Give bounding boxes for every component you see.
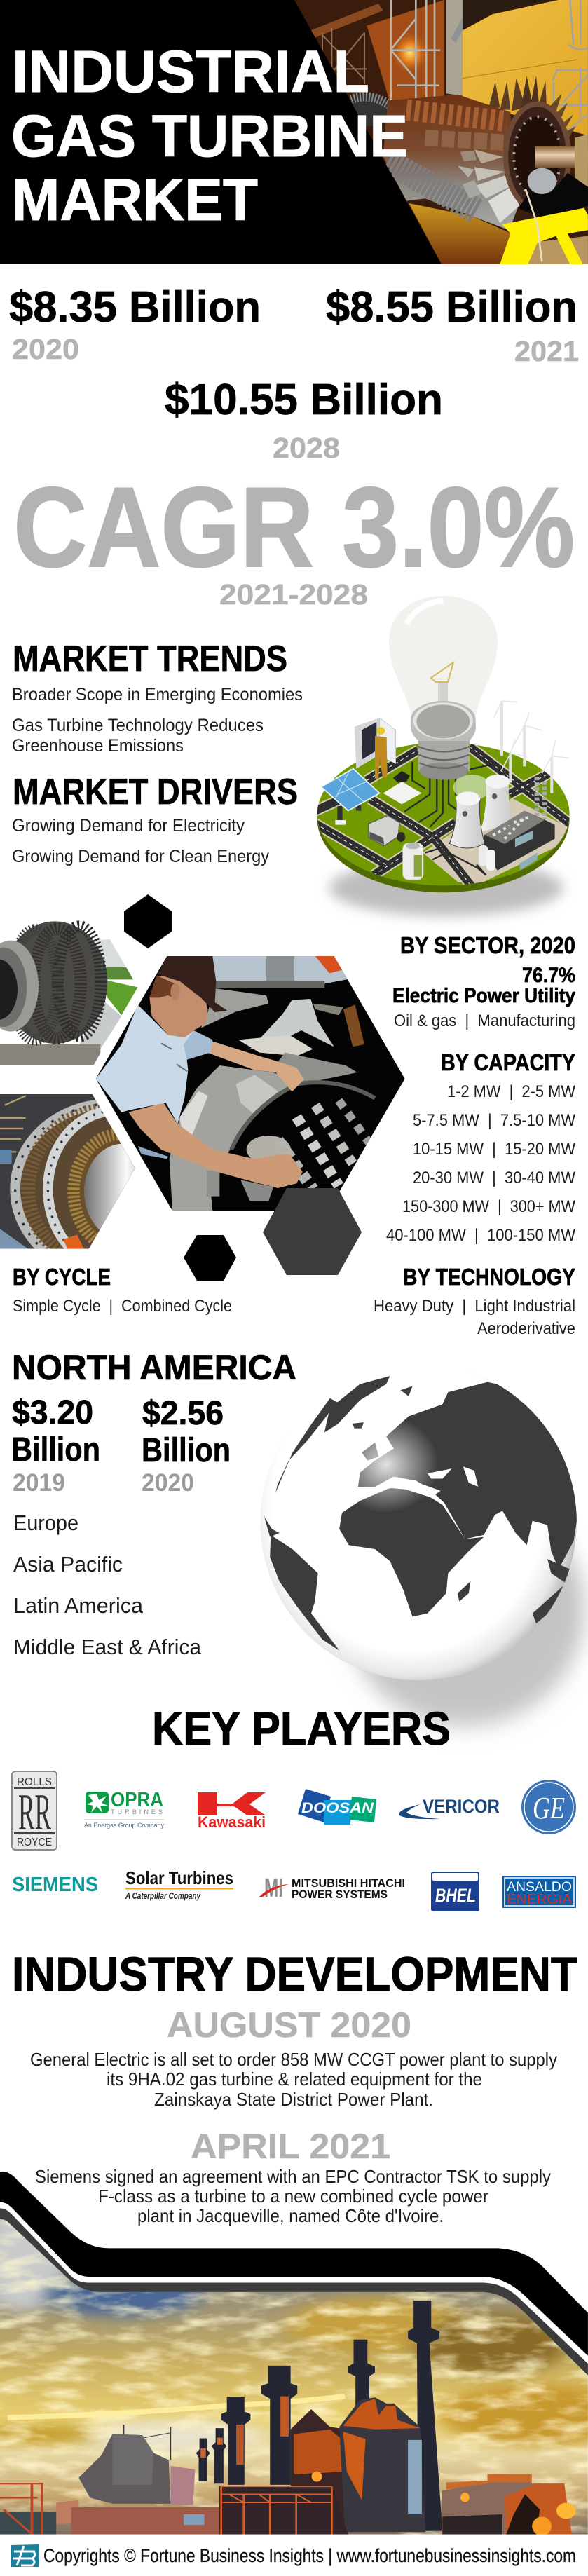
driver items: Growing Demand for Electricity — [12, 816, 245, 836]
title: INDUSTRIAL — [12, 39, 369, 104]
photo: power plant at sunset — [0, 2207, 588, 2535]
title — [11, 39, 408, 233]
logo: Vericor: VERICOR — [423, 1796, 500, 1817]
other regions: Europe — [13, 1511, 78, 1535]
logo: GE — [521, 1780, 576, 1834]
other regions: Middle East & Africa — [13, 1635, 202, 1659]
panel: by technology: Aeroderivative — [477, 1319, 575, 1338]
panel: by technology: Heavy Duty | Light Industrial — [374, 1297, 575, 1316]
logo: Solar Turbines: A Caterpillar Company — [125, 1890, 201, 1901]
logo: Mitsubishi Hitachi Power Systems: MITSUBISHI HITACHI — [292, 1876, 405, 1890]
logo: Mitsubishi Hitachi Power Systems: POWER SYSTEMS — [292, 1888, 388, 1901]
panel: by cycle: Simple Cycle | Combined Cycle — [13, 1297, 232, 1316]
panel: by capacity: 1-2 MW | 2-5 MW — [447, 1082, 575, 1101]
logo: OPRA Turbines: OPRA — [111, 1789, 163, 1811]
development: August 2020: AUGUST 2020 — [167, 2005, 411, 2045]
stat 2020: 2020 — [142, 1469, 194, 1497]
development: April 2021: plant in Jacqueville, named Côte d'Ivoire. — [137, 2205, 444, 2226]
logo: Siemens: SIEMENS — [12, 1874, 98, 1896]
logo: Mitsubishi Hitachi Power Systems: MI — [264, 1874, 283, 1903]
other regions: Latin America — [13, 1593, 144, 1618]
logo: BHEL — [431, 1872, 479, 1911]
logo: Doosan: DOOSAN — [301, 1800, 374, 1816]
stat 2020 — [142, 1395, 231, 1497]
icon: cooling towers — [449, 775, 514, 848]
stat 2028: 2028 — [273, 432, 340, 464]
panel: by capacity — [386, 1049, 575, 1245]
panel: market drivers: MARKET DRIVERS — [13, 772, 298, 812]
icon: wind turbines — [494, 701, 569, 793]
logo: Rolls-Royce: ROLLS — [17, 1776, 52, 1788]
icon: light bulb — [389, 596, 498, 780]
logo: Ansaldo Energia: ENERGIA — [507, 1893, 572, 1907]
stat 2019: 2019 — [13, 1469, 65, 1497]
globe — [260, 1363, 585, 1726]
panel: by cycle: BY CYCLE — [13, 1264, 111, 1290]
icon: generator — [369, 815, 405, 846]
driver items: Growing Demand for Clean Energy — [12, 847, 269, 866]
photo: turbine rotor in workshop — [294, 0, 588, 264]
panel: by capacity: 10-15 MW | 15-20 MW — [413, 1140, 575, 1159]
panel: market trends — [12, 639, 303, 756]
development: April 2021 — [35, 2127, 551, 2226]
photo collage hexagons — [0, 894, 418, 1281]
panel: by capacity: 5-7.5 MW | 7.5-10 MW — [413, 1111, 575, 1130]
other regions — [13, 1511, 202, 1659]
stat 2021: $8.55 Billion — [326, 283, 577, 332]
trend items — [12, 685, 303, 756]
header banner — [0, 0, 588, 264]
footer — [11, 2544, 576, 2567]
process plant — [290, 2409, 345, 2523]
heading: key players: KEY PLAYERS — [152, 1703, 451, 1755]
title: GAS TURBINE — [11, 103, 408, 169]
other regions: Asia Pacific — [13, 1552, 123, 1576]
icon: control panel and worker — [355, 718, 396, 779]
driver items — [12, 816, 269, 866]
panel: north america — [11, 1348, 296, 1659]
logo: Rolls-Royce: RR — [18, 1784, 51, 1841]
logo: Mitsubishi Hitachi Power Systems — [259, 1874, 405, 1903]
turbine hall — [170, 2466, 195, 2505]
gray band — [0, 2208, 588, 2376]
trend items: Broader Scope in Emerging Economies — [12, 685, 303, 704]
photo: engine rings — [0, 1094, 135, 1249]
right building — [442, 2474, 570, 2535]
foreground steel — [0, 2512, 56, 2535]
panel: by sector — [392, 932, 575, 1030]
panel: by sector: Oil & gas | Manufacturing — [394, 1011, 575, 1030]
icon: solar panel — [321, 769, 380, 825]
hexagon: dark gray — [263, 1188, 362, 1275]
development: April 2021: F-class as a turbine to a new combined cycle power — [98, 2186, 488, 2207]
stat 2019: Billion — [11, 1431, 100, 1468]
illustration: light bulb on energy island — [315, 596, 570, 916]
logo: Kawasaki — [198, 1792, 266, 1831]
stat 2028 — [165, 376, 443, 464]
stat 2019: $3.20 — [12, 1394, 93, 1431]
logo: OPRA Turbines — [84, 1789, 164, 1829]
panel: north america: NORTH AMERICA — [12, 1348, 296, 1387]
panel: by capacity: 20-30 MW | 30-40 MW — [413, 1168, 575, 1187]
development: August 2020: Zainskaya State District Power Plant. — [154, 2089, 433, 2110]
stat 2021 — [326, 283, 579, 367]
logo: OPRA Turbines: TURBINES — [111, 1808, 163, 1815]
stat 2020: 2020 — [12, 333, 79, 365]
hexagon: black top — [124, 894, 172, 948]
stat 2021: 2021 — [514, 335, 579, 367]
logo: Solar Turbines — [125, 1867, 233, 1901]
logo: Ansaldo Energia — [502, 1876, 576, 1908]
panel: market drivers — [12, 772, 298, 866]
black band — [0, 2172, 588, 2356]
logo: Rolls-Royce: ROYCE — [17, 1836, 52, 1848]
panel: market trends: MARKET TRENDS — [13, 639, 287, 679]
logo: Solar Turbines: Solar Turbines — [125, 1867, 233, 1888]
stat 2020 — [9, 283, 261, 365]
panel: by technology — [374, 1264, 575, 1338]
logo: Kawasaki: Kawasaki — [198, 1813, 266, 1831]
trend items: Greenhouse Emissions — [12, 736, 184, 756]
logo: BHEL: BHEL — [435, 1885, 476, 1906]
photo: technician working on a turbine — [91, 953, 418, 1213]
CAGR: 2021-2028 — [219, 578, 368, 611]
icon: Fortune Business Insights logo — [11, 2544, 39, 2567]
stat 2020: $2.56 — [142, 1395, 224, 1432]
development: April 2021: APRIL 2021 — [191, 2127, 390, 2166]
stacks — [408, 2301, 442, 2531]
logo: Rolls-Royce — [12, 1771, 57, 1850]
logo: GE: GE — [533, 1791, 565, 1825]
panel: by sector: 76.7% — [522, 964, 575, 987]
stat 2019 — [11, 1394, 100, 1497]
stat 2028: $10.55 Billion — [165, 376, 443, 424]
market size stats — [9, 283, 579, 611]
logo: Doosan — [298, 1789, 376, 1825]
stat 2020: $8.35 Billion — [9, 283, 261, 332]
trend items: Gas Turbine Technology Reduces — [12, 716, 264, 735]
title: MARKET — [12, 167, 258, 233]
development: April 2021: Siemens signed an agreement with an EPC Contractor TSK to supply — [35, 2166, 551, 2187]
decorative swoosh bands — [0, 2172, 588, 2376]
development: August 2020: its 9HA.02 gas turbine & related equipment for the — [107, 2069, 482, 2090]
logo: OPRA Turbines: An Energas Group Company — [84, 1822, 164, 1829]
stat 2020: Billion — [142, 1432, 231, 1469]
panel: by capacity: 40-100 MW | 100-150 MW — [386, 1226, 575, 1245]
logo: Vericor — [399, 1796, 500, 1819]
panel: by cycle — [13, 1264, 232, 1316]
development: August 2020 — [30, 2005, 557, 2110]
photo: turbine rotor outdoors — [0, 911, 140, 1065]
development: August 2020: General Electric is all set to order 858 MW CCGT power plant to supply — [30, 2049, 557, 2070]
icon: battery — [403, 843, 423, 880]
icon: power station building — [479, 777, 555, 871]
hexagon: black bottom — [184, 1235, 236, 1281]
logo: Ansaldo Energia: ANSALDO — [507, 1880, 572, 1895]
